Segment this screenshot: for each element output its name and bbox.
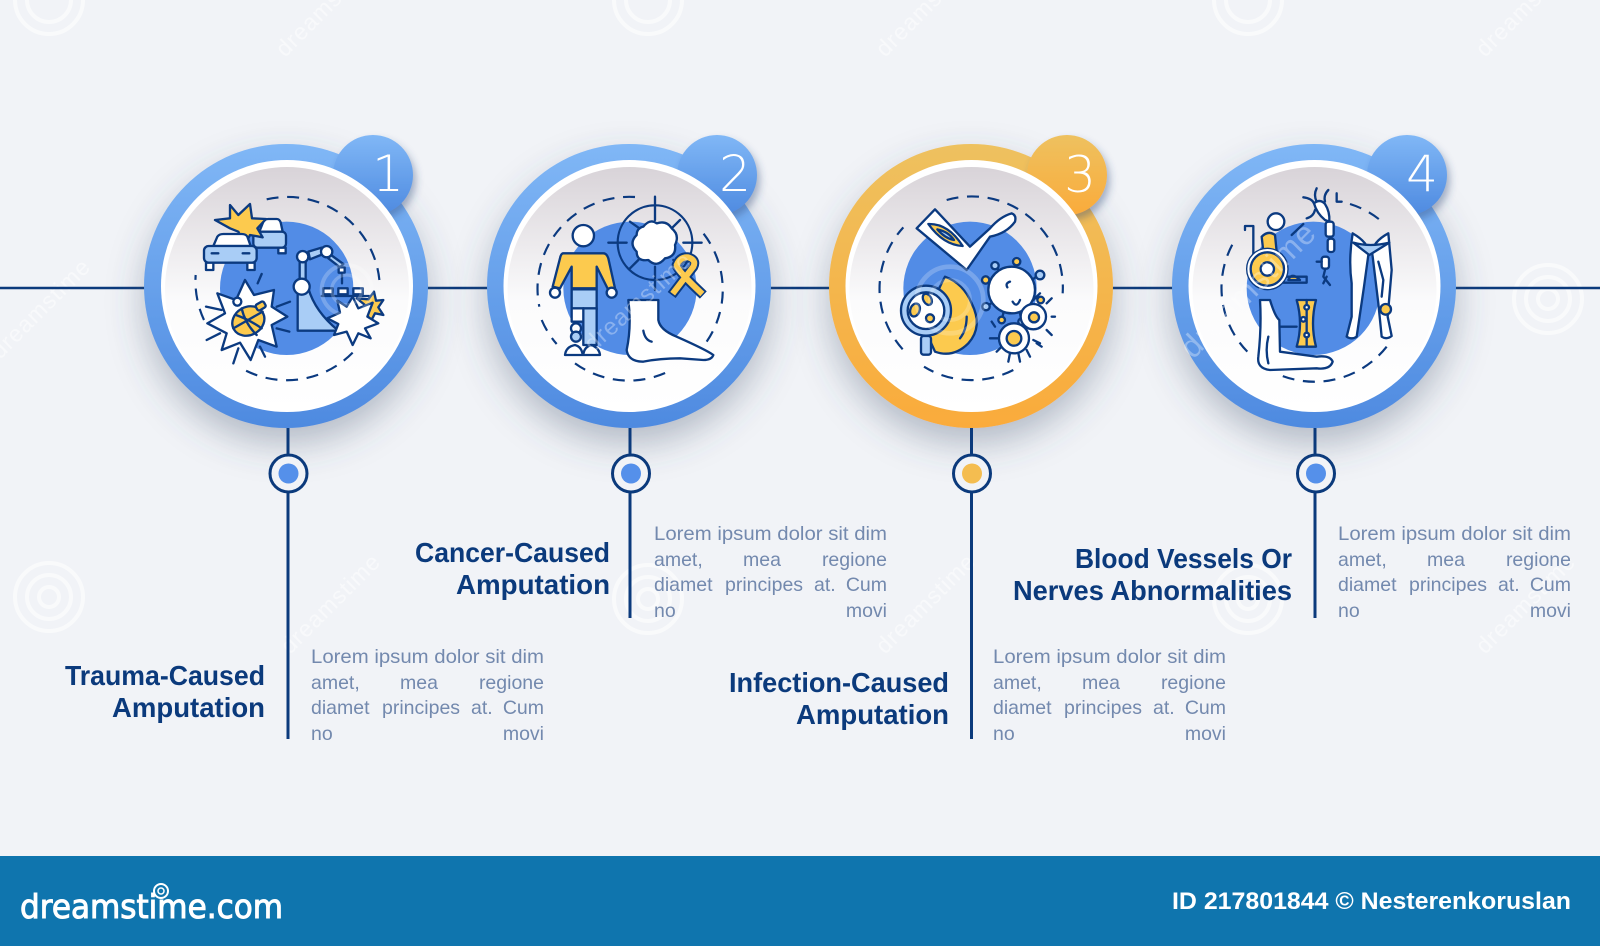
text block 1: principes <box>382 697 460 719</box>
text block 1 <box>311 646 544 745</box>
connector 3 <box>954 428 990 739</box>
text block 2: regione <box>822 549 887 571</box>
heading: Blood Vessels Or Nerves Abnormalities: Nerves Abnormalities <box>1013 575 1292 606</box>
connector 4 <box>1298 428 1334 618</box>
heading: Infection-Caused Amputation <box>729 667 949 730</box>
text block 3: no <box>993 723 1015 745</box>
text block 4 <box>1338 523 1571 622</box>
text block 2: amet, <box>654 549 703 571</box>
watermark <box>0 0 1582 659</box>
text block 3 <box>993 646 1226 745</box>
text block 2: mea <box>743 549 781 571</box>
icon: blood vessels and nerves <box>1221 188 1392 382</box>
heading: Blood Vessels Or Nerves Abnormalities <box>1013 543 1292 606</box>
text block 4: Cum <box>1530 574 1571 596</box>
text block 4: amet, <box>1338 549 1387 571</box>
watermark: dreamstime <box>275 548 386 659</box>
footer banner <box>0 856 1600 946</box>
badge 4 <box>1367 135 1447 215</box>
connector 1 <box>270 428 307 739</box>
text block 3: movi <box>1185 723 1226 745</box>
heading: Cancer-Caused Amputation: Amputation <box>456 569 610 600</box>
heading: Cancer-Caused Amputation: Cancer-Caused <box>415 537 610 568</box>
text block 2: principes <box>725 574 803 596</box>
connector 2 <box>612 428 650 618</box>
badge 4: 4 <box>1406 145 1438 203</box>
text block 2: Cum <box>846 574 887 596</box>
step 1 circle <box>144 135 428 428</box>
text block 2: at. <box>814 574 836 596</box>
text block 4: principes <box>1409 574 1487 596</box>
text block 3: mea <box>1082 672 1120 694</box>
text block 3: Cum <box>1185 697 1226 719</box>
badge 2: 2 <box>719 145 751 203</box>
step 4 circle <box>1172 135 1456 428</box>
text block 1: mea <box>400 672 438 694</box>
step 3 circle <box>829 135 1113 428</box>
logo: dreamstime.com <box>20 887 283 926</box>
icon: trauma causes <box>195 197 383 380</box>
text block 3: Lorem ipsum dolor sit dim <box>993 646 1226 668</box>
text block 1: at. <box>471 697 493 719</box>
horizontal timeline line <box>0 287 1600 289</box>
text block 4: diamet <box>1338 574 1397 596</box>
text block 4: at. <box>1498 574 1520 596</box>
text block 4: movi <box>1530 600 1571 622</box>
icon: cancer causes <box>538 197 723 381</box>
watermark over icon 4: dreamstime <box>1172 214 1323 365</box>
badge 1 <box>333 135 413 215</box>
heading: Blood Vessels Or Nerves Abnormalities: Blood Vessels Or <box>1075 543 1292 574</box>
text block 2: movi <box>846 600 887 622</box>
heading: Infection-Caused Amputation: Infection-Caused <box>729 667 949 698</box>
heading: Trauma-Caused Amputation: Trauma-Caused <box>65 660 265 691</box>
text block 4: no <box>1338 600 1360 622</box>
text block 4: mea <box>1427 549 1465 571</box>
credit: ID 217801844 © Nesterenkoruslan <box>1172 888 1571 915</box>
text block 3: diamet <box>993 697 1052 719</box>
badge 2 <box>677 135 757 215</box>
heading: Trauma-Caused Amputation: Amputation <box>112 692 265 723</box>
watermark over icon 2: dreamstime <box>579 247 698 357</box>
text block 1: movi <box>503 723 544 745</box>
text block 1: diamet <box>311 697 370 719</box>
watermark: dreamstime <box>1470 548 1581 659</box>
watermark: dreamstime <box>870 548 981 659</box>
icon: infection causes <box>880 196 1063 380</box>
text block 4: Lorem ipsum dolor sit dim <box>1338 523 1571 545</box>
text block 3: principes <box>1064 697 1142 719</box>
text block 3: regione <box>1161 672 1226 694</box>
text block 1: Cum <box>503 697 544 719</box>
text block 2: Lorem ipsum dolor sit dim <box>654 523 887 545</box>
badge 3 <box>1027 135 1107 215</box>
heading: Infection-Caused Amputation: Amputation <box>796 699 949 730</box>
text block 1: regione <box>479 672 544 694</box>
heading: Cancer-Caused Amputation <box>415 537 610 600</box>
text block 1: Lorem ipsum dolor sit dim <box>311 646 544 668</box>
text block 1: no <box>311 723 333 745</box>
text block 4: regione <box>1506 549 1571 571</box>
badge 3: 3 <box>1064 146 1096 204</box>
text block 2 <box>654 523 887 622</box>
badge 1: 1 <box>372 145 404 203</box>
text block 3: at. <box>1153 697 1175 719</box>
heading: Trauma-Caused Amputation <box>65 660 265 723</box>
step 2 circle <box>487 135 771 428</box>
text block 2: no <box>654 600 676 622</box>
text block 3: amet, <box>993 672 1042 694</box>
text block 1: amet, <box>311 672 360 694</box>
text block 2: diamet <box>654 574 713 596</box>
